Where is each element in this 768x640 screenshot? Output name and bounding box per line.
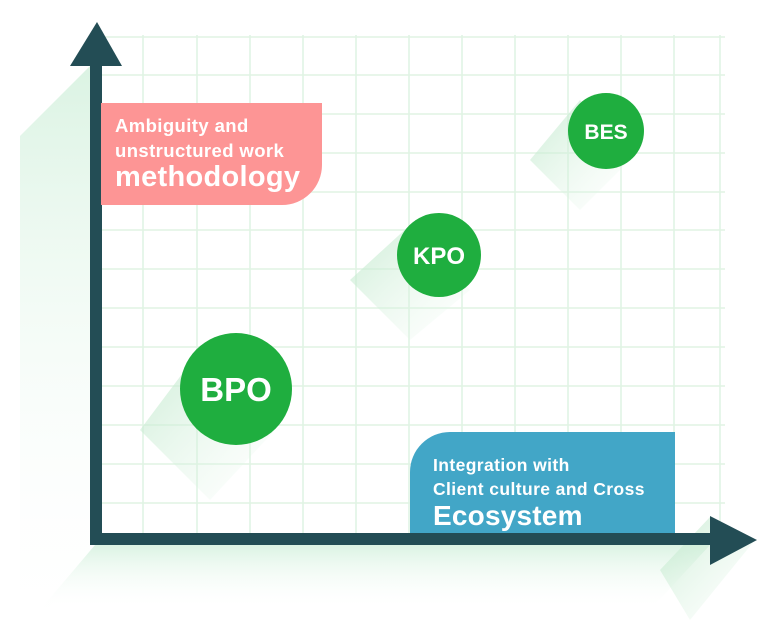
blue label text: Client culture and Cross — [433, 479, 645, 499]
circle: BES — [568, 93, 644, 169]
pink label text: unstructured work — [115, 140, 284, 161]
pink label text — [115, 115, 300, 193]
circle: KPO: KPO — [413, 243, 465, 270]
circle: BPO — [180, 333, 292, 445]
circle: BES: BES — [584, 121, 628, 144]
x axis — [90, 516, 757, 565]
blue label text — [433, 455, 645, 531]
pink label text: methodology — [115, 161, 300, 193]
circle shadows — [530, 100, 630, 210]
y axis — [70, 22, 122, 545]
blue label text: Ecosystem — [433, 500, 583, 531]
box: pink — [101, 103, 322, 205]
blue label text: Integration with — [433, 455, 570, 475]
box: blue — [410, 432, 675, 533]
pink label text: Ambiguity and — [115, 115, 249, 136]
circle: BPO: BPO — [200, 371, 272, 408]
circle: KPO — [397, 213, 481, 297]
axis shadows — [20, 66, 90, 640]
grid — [95, 35, 725, 535]
